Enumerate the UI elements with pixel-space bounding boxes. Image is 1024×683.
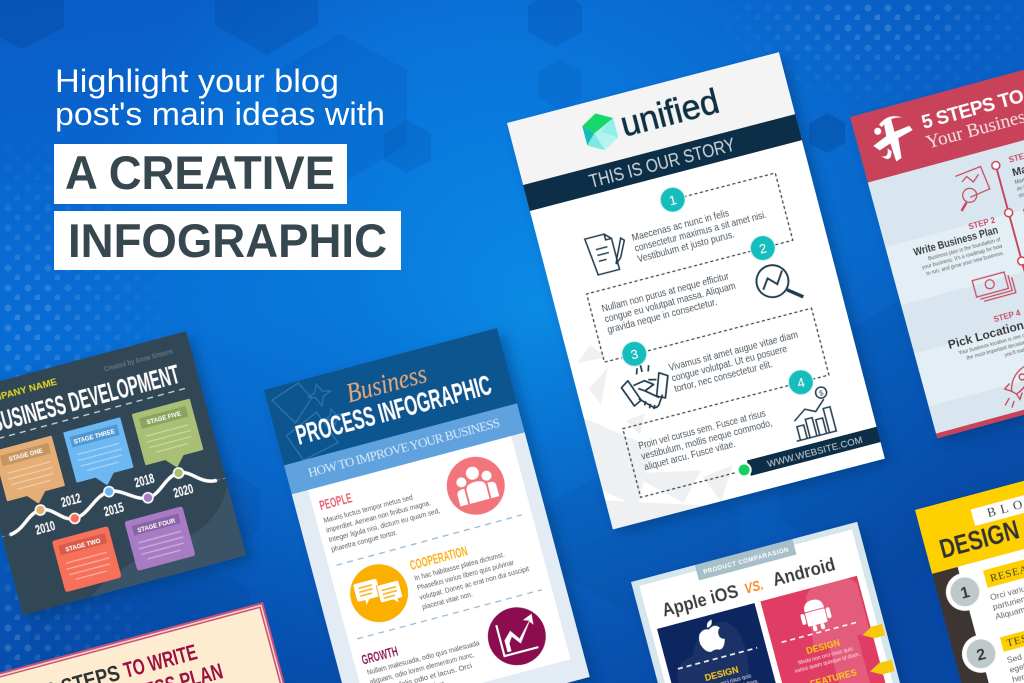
icon: handshake — [617, 359, 675, 416]
step 4: 4 — [796, 375, 806, 391]
section: cooperation — [344, 526, 533, 629]
column: apple: DESIGN — [704, 665, 740, 683]
step 3 — [611, 301, 807, 416]
panel: blog design — [915, 448, 1024, 683]
section: cooperation: placerat vitae non. — [421, 589, 474, 611]
step 2: your business. It's a roadmap for how — [921, 244, 1003, 271]
column: apple — [657, 603, 803, 683]
panel: five steps: 5 STEPS TO — [920, 86, 1024, 134]
step 2: congue eu volutpat massa. Aliquam — [603, 280, 737, 326]
step 2: STEP 2 — [967, 216, 997, 232]
step 1: Maecenas ac nunc in felis — [631, 207, 730, 244]
stage one — [0, 437, 66, 510]
column: android — [759, 572, 906, 683]
panel: business process infographic: HOW TO IMPROVE YOUR BUSINESS — [306, 415, 502, 480]
step 2 — [910, 216, 1006, 279]
step 1: 1 — [667, 192, 678, 208]
icon: magnifier chart — [753, 259, 803, 307]
section: cooperation: Phasellus varius libero quis pulvinar — [416, 558, 515, 592]
logo: unified — [580, 82, 723, 154]
step 1 — [942, 546, 1024, 633]
step 4: aliquet arcu. Fusce vitae. — [643, 438, 737, 473]
title: Android — [770, 554, 837, 590]
step 4 — [630, 364, 837, 480]
header line art — [269, 374, 351, 464]
stage five: STAGE FIVE — [146, 411, 182, 426]
step 2: gravida neque in consectetur. — [606, 296, 718, 336]
title: VS. — [743, 576, 765, 598]
heading — [54, 63, 401, 270]
step 4: Pick Location — [946, 318, 1024, 352]
heading lines: intro: post's main ideas with — [55, 96, 385, 132]
panel: business process infographic: Business — [343, 358, 430, 408]
panel: unified story — [507, 52, 885, 529]
step 3: congue volutpat. Ut eu posuere — [670, 343, 789, 385]
icon: document and pen — [585, 230, 631, 276]
column: android: DESIGN — [805, 638, 841, 656]
stage two — [52, 526, 122, 592]
timeline curve: 2010 — [33, 517, 57, 538]
background triangles — [566, 318, 741, 529]
timeline curve — [3, 454, 219, 544]
icon: speech bubbles — [344, 558, 415, 629]
timeline curve: 2015 — [102, 499, 126, 519]
heading lines: intro — [55, 63, 385, 132]
step 2: 2 — [975, 646, 988, 665]
step 2 — [594, 229, 803, 347]
panel: five steps — [850, 54, 1024, 438]
heading box: a creative: A CREATIVE — [65, 146, 335, 199]
step 1 — [578, 166, 771, 277]
timeline curve: 2018 — [133, 470, 156, 490]
step 4: STEP 4 — [993, 308, 1022, 324]
logo: star mark — [867, 112, 919, 166]
section: people: Mauris luctus tempor metus sed — [322, 493, 414, 525]
step 2: 2 — [758, 240, 768, 257]
panel: business process infographic — [264, 328, 590, 683]
yellow tabs — [859, 624, 895, 677]
panel: ten steps to write a business plan: TO WRITE — [121, 639, 200, 683]
stage four — [124, 506, 195, 571]
heading lines: intro: Highlight your blog — [55, 63, 339, 99]
icon: apple — [695, 618, 727, 654]
section: growth: GROWTH — [360, 643, 400, 668]
step 4: vestibulum, mollis neque commodo, — [640, 417, 774, 463]
banner: THIS IS OUR STORY — [587, 135, 737, 192]
icon: growth chart — [481, 601, 552, 672]
banner — [523, 114, 802, 211]
step 4 — [944, 308, 1024, 372]
tag: product comparison — [695, 539, 796, 580]
section: people: pharetra congue tortor. — [330, 528, 398, 554]
stage three — [64, 418, 135, 491]
icon: money — [972, 270, 1016, 303]
section: people: Integer ligula nisi, dictum eu quam sed, — [328, 506, 441, 544]
tag: product comparison: PRODUCT COMPARASION — [703, 546, 790, 576]
step 1: Vestibulum et justo purus. — [636, 228, 736, 265]
stage one: STAGE ONE — [8, 449, 44, 463]
stage four: STAGE FOUR — [137, 518, 177, 534]
icon: people — [440, 450, 511, 521]
step 1 — [1008, 133, 1024, 199]
section: cooperation: volutpat. Donec ac erat non dui suscipit — [418, 564, 530, 602]
section: people — [318, 450, 511, 554]
step 3: tortor, nec consectetur elit. — [673, 358, 774, 395]
section: people: imperdiet. Aenean non finibus magna. — [325, 498, 432, 535]
timeline curve: 2020 — [171, 480, 195, 501]
panel: ten steps to write a business plan — [0, 602, 315, 683]
step 2 — [958, 608, 1024, 683]
footer — [735, 427, 881, 479]
timeline curve: 2012 — [59, 489, 83, 510]
title — [660, 554, 838, 621]
panel: business process infographic: PROCESS INFOGRAPHIC — [292, 369, 495, 451]
stage three: STAGE THREE — [73, 429, 116, 446]
heading box: infographic: INFOGRAPHIC — [68, 214, 387, 267]
title: Apple iOS — [660, 581, 740, 621]
step 3: Vivamus sit amet augue vitae diam — [667, 329, 799, 374]
tag: blog — [971, 484, 1024, 526]
icon: dollar bar chart: $ — [818, 388, 825, 398]
section: growth — [359, 601, 553, 683]
icon: rocket — [996, 364, 1024, 409]
step 1: consectetur maximus a sit amet nisi. — [633, 209, 768, 255]
step 3: 3 — [629, 346, 640, 363]
section: people: PEOPLE — [318, 489, 354, 513]
panel: apple ios vs android — [631, 522, 919, 683]
step 1: 1 — [959, 584, 972, 603]
step 2: Write Business Plan — [912, 224, 1000, 259]
section: cooperation: In hac habitasse platea dictumst. — [413, 550, 505, 582]
timeline — [991, 161, 1024, 406]
icon: chart magnifier — [952, 166, 993, 211]
footer: WWW.WEBSITE.COM — [766, 435, 864, 470]
panel: business development — [0, 331, 246, 615]
step 2: Business plan is the foundation of — [928, 237, 1002, 262]
stage five — [133, 400, 205, 474]
step 2: Nullam non purus at neque efficitur — [600, 270, 731, 315]
dashed connector path — [569, 173, 847, 498]
panel: business development: Created by Anna Simons — [103, 346, 174, 374]
step 2: to run, and grow your new business. — [926, 250, 1005, 277]
column: android: varius quam quisque id diam. — [794, 652, 861, 675]
logo: unified: unified — [616, 82, 723, 145]
section: cooperation: COOPERATION — [408, 542, 469, 573]
icon: dollar bar chart — [785, 386, 837, 441]
step 4: Proin vel cursus sem. Fusce at risus — [637, 407, 767, 452]
column: android: Morbi non orci risus quis — [798, 646, 854, 667]
section: growth: Nullam malesuada, odio quis malesuada — [366, 638, 480, 677]
stage two: STAGE TWO — [65, 539, 102, 554]
icon: android — [797, 596, 834, 634]
